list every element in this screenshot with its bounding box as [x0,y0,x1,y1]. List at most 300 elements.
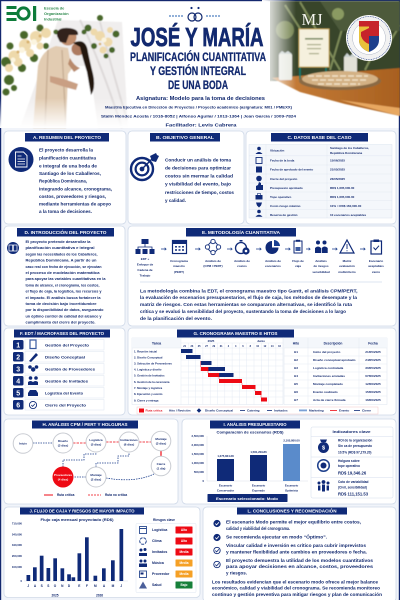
gantt chart: 2 [228,345,230,348]
seal [346,15,392,61]
gantt legend: Catering [247,409,260,413]
table C: Santiago de los Caballeros, [330,146,369,150]
flow: labels: escenarios [265,264,281,268]
table C [249,144,392,218]
text D: el impacto. El análisis busca fortalecer la [26,295,101,300]
icon: warning [340,240,354,253]
conclusions text: para apoyar decisiones en alcance, costos, proveedores [226,564,374,569]
risks table: Riesgos clave [153,518,175,522]
heading E [186,228,296,236]
text B: y calidad. [165,198,186,204]
risks table: Proveedor [152,572,170,576]
KPI box: RD$ 19,346.26 [338,470,367,476]
panel: F EDT: 6 [16,402,20,410]
KPI box: tope operativo [338,464,360,468]
text E: de la planificación del evento. [140,316,212,321]
bar chart: cash flow: 340,000 [12,543,22,547]
milestones table: H5 [294,382,298,386]
gantt legend: Ruta crítica [146,409,163,413]
gantt chart: 9. Cierre y entrega [134,398,159,402]
flow: labels: Enfoque de [137,262,153,266]
gantt chart: 1. Reunión inicial [134,349,157,353]
risks table: Clima [152,539,162,543]
panel: H CPM: Proveedores [54,473,72,477]
bar chart: cash flow: 0 [20,579,22,583]
KPI box: (Civil, sensibilidad) [338,486,367,490]
conclusions text [212,520,382,597]
panel: F EDT [4,328,125,415]
table C: Fecha de la boda [270,158,295,162]
gantt legend: Invitados [274,409,288,413]
panel: G cronograma [128,328,396,415]
heading I: I. ANÁLISIS PRESUPUESTARIO [224,421,287,427]
text A: a la toma de decisiones. [39,209,92,214]
milestones table: Hito [293,342,299,346]
milestones table: Evento realizado [313,390,338,394]
gantt chart: 6 [242,345,244,348]
milestones table: Descripción [324,342,342,346]
icon: money bag: $ [322,446,325,452]
icon: pie [266,240,280,254]
flow: labels: Análisis de [205,259,221,263]
network legend [44,493,127,497]
milestones table: Diseño conceptual aprobado [313,358,356,362]
bar chart: cash flow: M [94,584,97,588]
milestones table: H4 [294,374,298,378]
table C: 10% = RD$ 160,000.00 [330,204,362,208]
panel: E metodologia [128,226,396,326]
phase labels: Logística del Evento [45,390,84,396]
panel: H CPM: Cierre [157,462,166,466]
gantt legend: Marketing [309,409,324,413]
bar chart: cash flow: 540,000 [12,532,22,536]
gantt chart: 16 [278,345,281,348]
gantt chart: 7. Montaje y logística [134,386,163,390]
text A [39,148,112,214]
milestones table: H1 [294,350,298,354]
risk pills [176,526,192,588]
title: DE UNA BODA [168,78,228,92]
panel: F EDT: 5 [16,390,20,398]
gantt chart: 23 [191,345,194,348]
text E [140,288,358,321]
milestones table: 30/05/2025 [365,366,381,370]
gantt chart: 8. Ejecución y evento [134,392,163,396]
panel: I presupuesto [182,419,396,504]
text E: matriz de riesgos. Con estas herramientas se compararon alternativas, se identificó la ruta [140,302,353,307]
heading J [20,508,144,514]
gantt chart: 8 [250,345,252,348]
KPI box: Holgura sobre [338,459,360,463]
text D: planificación cuantitativa e integral [26,245,94,250]
risk pills: Bajo [181,583,187,587]
phase icons [28,340,38,409]
table C: Costo riesgo máximo [270,204,301,208]
milestones table: 24/05/2025 [365,358,381,362]
flow: arrows [161,248,365,250]
bar chart: cash flow: 710,000 [12,522,22,526]
risk pills: Media [179,550,189,554]
flow: labels: evaluación [339,264,355,268]
KPI box [311,427,393,498]
panel: F EDT: 4 [16,378,20,386]
icon: checklist [371,240,382,254]
gantt chart: 14 [271,345,274,348]
bar chart: scenarios: Escenario [219,484,232,488]
table C: RD$ 1,605,000.00 [330,195,355,199]
text E: La metodología combina la EDT, el cronograma maestro tipo Gantt, el análisis CPM/PERT, [140,288,358,294]
gantt chart: 12 [264,345,267,348]
bar chart: cash flow: 100,000 [12,565,22,569]
text A: integrando alcance, cronograma, [39,186,112,191]
text B: Conducir un análisis de toma [165,158,231,164]
program line: Maestría Ejecutiva en Dirección de Proyectos / Proyecto académico (asignatura: M01 / PMEXX) [105,106,292,110]
bar chart: cash flow: M [112,584,115,588]
risks table: Invitados [152,550,167,554]
gantt chart: 2. Diseño Conceptual [134,355,163,359]
gantt chart: Junio [257,339,265,343]
gantt chart: 29 [212,345,216,348]
panel: A resumen [4,131,126,224]
photo: reception table [262,0,400,126]
flow: labels: Escenario [369,259,383,263]
flow: labels: Matriz [343,259,352,263]
panel: L conclusiones [203,507,396,600]
flow: labels: de riesgos [313,264,329,268]
bar chart: cash flow: 2025 [51,594,59,598]
heading C: C. DATOS BASE DEL CASO [288,135,352,140]
gantt chart: 5. Gestión de Invitados [134,373,165,377]
flow: labels: Trabajo [140,274,151,278]
heading G [177,330,294,338]
milestones table [284,338,387,404]
bar chart: cash flow: D [68,584,71,588]
panel: H CPM: (6 días) [124,442,134,446]
icon: people [315,240,328,253]
flow: labels: EDT + [141,257,150,261]
heading B: B. OBJETIVO GENERAL [156,135,214,140]
flow: labels: costos [237,264,247,268]
table C: Ubicación [270,148,285,152]
milestones table: Inicio del proyecto [313,350,340,354]
milestones table: H7 [294,398,298,402]
bar chart: cash flow: E [78,584,80,588]
milestones table: 07/06/2025 [365,374,381,378]
heading J: J. FLUJO DE CAJA Y RIESGOS DE MAYOR IMPACTO [30,509,135,514]
text D: cumplimiento del cierre del proyecto. [26,320,96,325]
risk pills: Alto [181,539,187,543]
icon: clipboard [294,240,302,253]
icon: cost timer [236,240,250,255]
flow: labels: Análisis de [234,259,250,263]
title: JOSÉ Y MARÍA [130,22,264,52]
table C: RD$ 1,605,000.00 [330,186,355,190]
text D: el flujo de caja, la logística, los recursos y [26,289,102,294]
bar chart: scenarios: 2,500,000 [192,434,204,438]
bar chart: scenarios: 1,581,209.86 [250,450,267,454]
text D: toma de decisión bajo incertidumbre [26,301,97,306]
flow: labels: Análisis [315,259,327,263]
conclusions text: Los resultados evidencian que el escenario modo ofrece al mejor balance [212,580,379,584]
heading L [237,508,347,514]
table C: Cierre del proyecto [270,177,298,181]
gantt chart [132,338,283,404]
milestones table: Logística contratada [313,366,344,370]
panel: H CPM [4,419,178,504]
flow: labels: (CPM / PERT) [203,264,223,268]
panel: D introduccion [4,226,125,326]
flow: labels: maestro [173,264,185,268]
milestones table: H2 [294,358,298,362]
text B [165,158,234,204]
bar chart: cash flow: A [34,584,37,588]
table C: 15/06/2025 [330,158,345,162]
bar chart: scenarios: Conservador [217,488,235,492]
text A: e integral de una boda de [39,163,98,168]
text D: por la disponibilidad de datos, asegurando [26,307,104,312]
risks table: Música [152,561,164,565]
KPI box: 10.5% (RD$ 97,279.20) [338,450,372,454]
bar chart: scenarios: Escenario [252,484,265,488]
text D: toma de alcance, el cronograma, los costos, [26,282,100,287]
heading L: L. CONCLUSIONES Y RECOMENDACIÓN [248,509,336,514]
table C: Tope operativo [270,195,291,199]
flow: labels [137,257,384,278]
gantt legend: Hito / Revisión [169,409,191,413]
conclusions text: calidad y viabilidad del cronograma. [226,526,290,531]
bar chart: scenarios: 1,500,000 [192,452,204,456]
conclusions text: Se recomienda ejecutar en modo “Óptimo”. [226,534,327,540]
text A: costos, proveedores y riesgos, [39,194,106,199]
icon: network [205,239,221,255]
text D: un óptimo control de calidad del alcance y [26,313,102,318]
title [130,22,266,92]
bar chart: scenarios: 2,105,800.00 [283,438,300,442]
text A: mediante herramientas de apoyo [39,202,111,207]
milestones table: H3 [294,366,298,370]
title: PLANIFICACIÓN CUANTITATIVA [130,49,266,64]
bar chart: cash flow [12,518,128,598]
table C: República Dominicana [330,151,363,155]
KPI box: Coto de variabilidad [338,480,369,484]
text D [26,239,106,325]
phase labels [45,342,96,408]
network legend: Ruta crítica [57,493,75,497]
gantt chart: 31 [220,345,223,348]
gantt chart: 4. Logística y diseño [134,367,162,371]
milestones table: 16/06/2025 [365,398,381,402]
gantt chart: 21 [183,345,187,348]
flow: icons [136,239,382,255]
KPI box: RD$ 111,151.53 [338,492,369,496]
icon: document [8,147,34,172]
gantt legend: Cierre [362,409,371,413]
gantt chart: 3. Selección de Proveedores [134,361,172,365]
text E: la evaluación de escenarios presupuestarios, el flujo de caja, los métodos de desempate y la [140,295,358,300]
panel: H CPM: (3 días) [156,442,166,446]
logo: EOI: Organización [44,11,69,16]
panel: H CPM: Logística [89,438,103,442]
heading D: D. INTRODUCCIÓN DEL PROYECTO [24,230,107,235]
table C: 23/05/2025 [330,177,345,181]
conclusions text: El proyecto demuestra la utilidad de los modelos cuantitativos [226,558,374,563]
bar chart: cash flow: 2026 [96,594,103,598]
risk pills: Alto [181,528,187,532]
bar chart: scenarios: 0 [202,479,204,483]
gantt chart: 4 [235,345,237,348]
milestones table: 21/05/2025 [365,350,381,354]
text A: El proyecto desarrolla la [39,148,94,152]
gantt chart: 2025 [208,339,215,343]
panel: C datos base [246,131,396,224]
risk icons [139,526,147,588]
gantt chart: Tarea [152,342,162,346]
bar chart: cash flow: J [27,584,29,588]
gantt chart: 27 [205,345,208,348]
bar chart: cash flow: A [103,584,106,588]
bar chart: scenarios: 1,000,000 [192,461,204,465]
bar chart: cash flow: S [41,584,43,588]
flow: labels: caja [295,264,301,268]
logo: EOI [6,6,69,22]
text B: restricciones de tiempo, costos [165,190,234,196]
bar chart: cash flow: 200,000 [12,554,22,558]
risks table: Salud [152,583,162,587]
panel: H CPM: (2 días) [91,478,101,482]
heading A: A. RESUMEN DEL PROYECTO [33,135,102,140]
flow: labels: cierre [372,270,380,274]
text B: de decisiones para optimizar [165,166,231,172]
table C: Presupuesto aprobado [270,186,303,190]
milestones table: H6 [294,390,298,394]
bar chart: scenarios: Comparación de escenarios (RD$) [216,430,284,434]
panel: H CPM: Montaje [90,473,102,477]
milestones table: Montaje completado [313,382,343,386]
bar chart: cash flow: J [120,584,122,588]
conclusions text: y mantener flexibilidad ante cambios en proveedores o fecha. [226,550,367,555]
flow: labels: aceptables [368,264,384,268]
milestones table: 12/06/2025 [365,382,381,386]
flow: labels: Flujo de [292,259,304,263]
title: Y GESTIÓN INTEGRAL [150,63,246,78]
KPI box: Sin ca de presupuesto [338,444,372,448]
heading E: E. METODOLOGÍA CUANTITATIVA [202,230,281,235]
milestones table: Invitaciones enviadas [313,374,345,378]
text A: Santiago de los Caballeros, [39,171,101,176]
network legend: Ruta no crítica [105,493,127,497]
panel: H CPM: Diseño [58,439,68,443]
bar chart: cash flow: O [54,584,57,588]
milestones table: Fecha [368,342,378,346]
gantt legend: Evento [339,409,349,413]
flow: labels: sensibilidad [312,270,330,274]
flow: labels: Análisis de [265,259,281,263]
network links [33,442,161,480]
bar chart: scenarios: Esperado [252,488,265,492]
panel: H CPM: Invitaciones [120,438,138,442]
panel: H CPM: (3 días) [58,444,68,448]
phase labels: Diseño Conceptual [45,354,85,360]
gantt chart: 6. Gestión de la ceremonia [134,380,170,384]
icon: calendar [172,240,186,254]
panel: B objetivo [128,131,244,224]
text D: según las necesidades de los Caballeros, [26,251,98,256]
text E: crítica y se evaluó la sensibilidad del proyecto, sustentando la toma de decisiones a lo largo [140,309,346,314]
phase labels: Gestión del Proyecto [45,342,90,348]
risk pills: Media [179,572,189,576]
icon: target [131,153,159,180]
logo: EOI: Industrial [44,16,62,22]
panel: H CPM: (4 días) [58,478,68,482]
course line: Asignatura: Modelo para la toma de decisiones [136,96,265,102]
monogram: MJ [301,10,323,29]
pill: selected scenario: Escenario seleccionado: Modo [216,496,279,501]
panel: H CPM: Inicio [19,442,27,446]
icon: book [7,242,19,254]
check icons [213,520,221,568]
gantt legend [137,407,378,414]
heading I [210,420,300,428]
icon: gauge [318,460,329,471]
text A: República Dominicana, [39,179,87,184]
bar chart: scenarios: 2,000,000 [192,443,204,447]
heading H: H. ANÁLISIS CPM / PERT Y HOLGURAS [42,421,128,427]
conclusions text: económico, calidad y viabilidad del cronograma. Se recomienda monitoreo [212,586,380,590]
flow: labels: multicriterio [338,270,356,274]
heading H [32,420,138,428]
risks table: Logística [152,528,167,532]
bar chart: scenarios: 1,275,824.28 [217,454,234,458]
conclusions text: y riesgos. [226,570,247,576]
text D: República Dominicana. A partir de un [26,258,97,263]
KPI box: ROI de la organización [338,439,372,443]
conclusions text: continuo y gestión preventiva para mitigar riesgos y plan de comunicación [212,592,382,597]
text A: planificación cuantitativa [39,155,97,160]
panel: H CPM: (1 día) [157,466,165,470]
text D: caso real con fecha de ejecución, se ejecutan [26,264,102,269]
bar chart: scenarios: Optimista [285,488,298,492]
facilitator: Facilitador: Levis Cabrera [166,122,237,128]
gantt chart: 25 [198,345,201,348]
authors: Stalin Méndez Acosta / 1016-8052 | Alfonso Aguilar / 1013-1364 | Jean García / 1009-7824 [101,114,296,118]
bar chart: cash flow: S [47,584,49,588]
text B: y visibilidad del evento, bajo [165,182,231,188]
table C: 21/05/2025 [330,168,345,172]
photo: wedding couple [0,15,130,128]
bar chart: scenarios [192,430,308,492]
risk pills: Media [179,561,189,565]
ornament: rings [169,7,221,21]
flow: labels: Cadena de [137,268,153,272]
icon: people group [318,480,330,492]
bar chart: cash flow: F [86,584,88,588]
phase labels: Gestión de Proveedores [45,366,96,372]
bar chart: scenarios: Escenario [285,484,298,488]
flow: labels: Cronograma [170,259,188,263]
heading F: F. EDT / MACROFASES DEL PROYECTO [20,331,105,336]
milestones table: Acta de cierre firmada [313,398,346,402]
panel: F EDT: 1 [16,342,20,350]
heading C [271,133,368,142]
panel: J flujo de caja [4,507,200,598]
table C: Fecha de aprobado del evento [270,168,313,172]
panel: F EDT: 2 [16,354,20,362]
logo: EOI: Escuela de [44,6,65,10]
pill: selected scenario [208,494,288,502]
network nodes [13,431,171,487]
row boxes [25,340,104,410]
gantt chart: 10 [256,345,260,348]
